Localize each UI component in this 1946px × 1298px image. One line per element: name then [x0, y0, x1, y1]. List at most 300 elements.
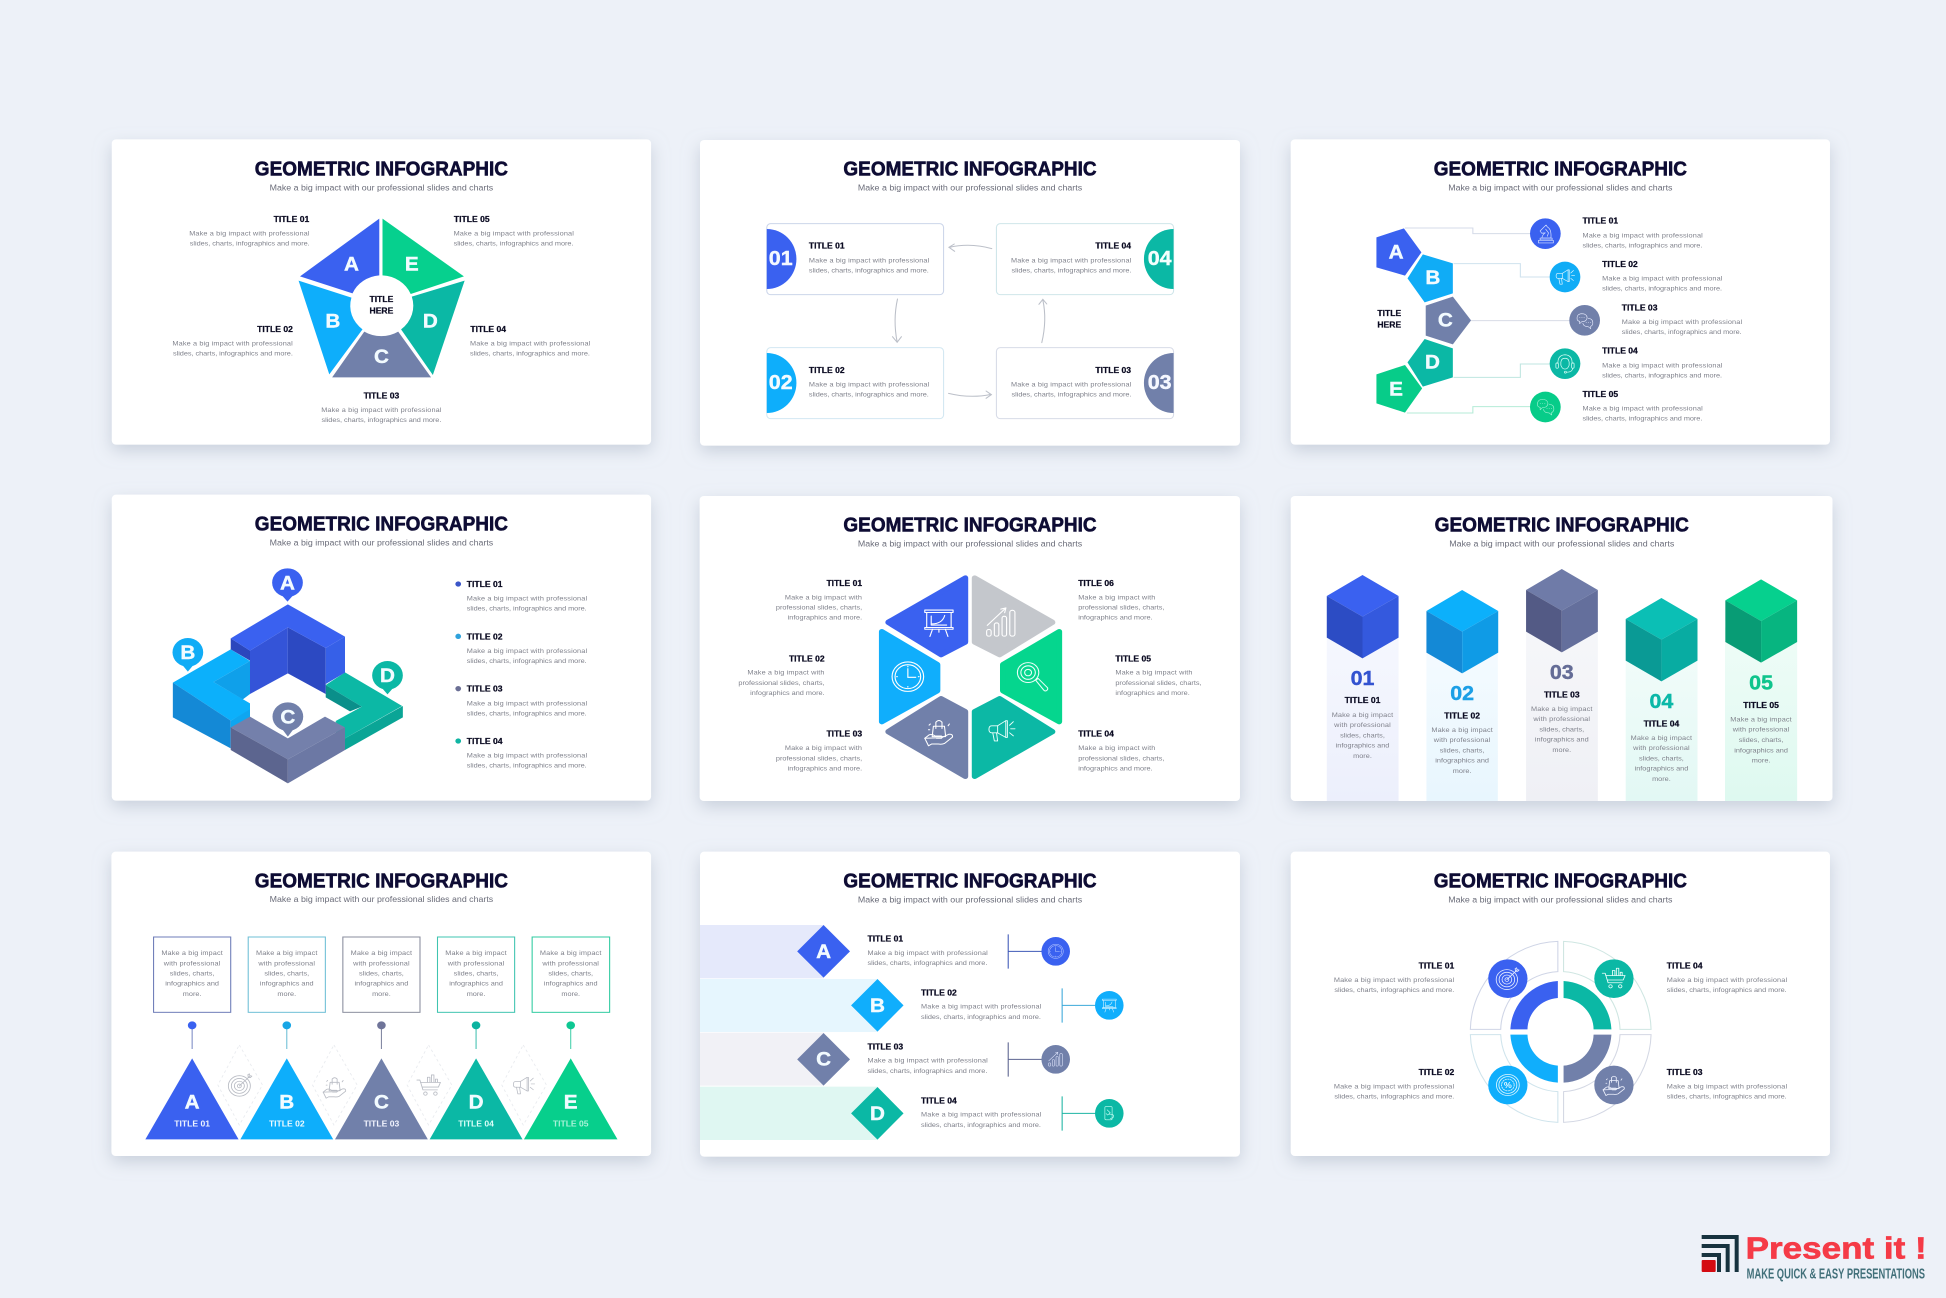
text box C [343, 937, 420, 1012]
icon: percent ring: % [1504, 1080, 1512, 1090]
pin connectors [188, 1021, 575, 1049]
logo mark [1702, 1237, 1737, 1272]
text: title 04: Make a big impact with professional [1602, 362, 1723, 369]
column 04: infographics and [1635, 765, 1688, 773]
text box A: more. [183, 990, 202, 998]
connector + phone icon [1062, 1096, 1124, 1131]
marker B: B [180, 643, 195, 664]
marker A [272, 568, 303, 602]
text: title 01: Make a big impact with professional [1582, 232, 1703, 239]
label: title here: TITLE [1377, 308, 1402, 318]
hexagon segments [882, 578, 1059, 776]
text: title 05: slides, charts, infographics and more. [454, 240, 573, 248]
column 05: more. [1752, 757, 1770, 765]
pentagon chain: B [1425, 268, 1440, 289]
heading: GEOMETRIC INFOGRAPHIC [843, 514, 1097, 536]
text box C: with professional [352, 960, 410, 967]
text: title 04: Make a big impact with professional [921, 1111, 1042, 1119]
text: title 03: TITLE 03 [364, 391, 400, 400]
triangle E [524, 1058, 617, 1139]
text: title 02: Make a big impact with [747, 669, 825, 677]
column 01: infographics and [1336, 742, 1389, 750]
text: title 04 [470, 324, 591, 358]
icon: cart [417, 1075, 440, 1095]
label: title here: HERE [1377, 320, 1402, 330]
text: title 04: slides, charts, infographics and more. [1667, 986, 1787, 994]
isometric block chart [173, 604, 403, 783]
triangle A: TITLE 01 [174, 1119, 210, 1129]
icon: target [228, 1074, 252, 1096]
text: title 03 [321, 391, 442, 424]
pentagon chain: D [1425, 352, 1440, 373]
text: title 03: professional slides, charts, [776, 755, 862, 762]
text box E: infographics and [544, 980, 598, 988]
column 02 [1426, 590, 1498, 775]
list item 01: TITLE 01 [467, 579, 503, 589]
text: title 01: Make a big impact with professional [1334, 976, 1455, 984]
logo: Present it [1702, 1231, 1927, 1282]
icon: target [1488, 959, 1527, 998]
list item 02: TITLE 02 [467, 632, 503, 641]
panel 5: hexagon [700, 496, 1240, 801]
triangle A: A [185, 1092, 200, 1113]
heading: Make a big impact with our professional slides and charts [1448, 895, 1672, 904]
column 03 [1526, 569, 1598, 754]
text: title 02: Make a big impact with professional [1602, 275, 1723, 283]
list item 01 [455, 579, 588, 613]
triangle E: TITLE 05 [553, 1119, 589, 1129]
column 04: Make a big impact [1631, 734, 1692, 742]
text: title 04: slides, charts, infographics and more. [470, 350, 590, 358]
text: title 04 [921, 1096, 1042, 1129]
marker B [172, 638, 203, 672]
text: title 01 [189, 214, 310, 248]
text: title 04: Make a big impact with professional [470, 340, 591, 348]
pentagon chart: B [325, 311, 340, 332]
diamond B: B [870, 996, 885, 1017]
column 01 [1327, 575, 1399, 760]
pentagon chain: A [1389, 242, 1404, 263]
text box B: more. [277, 990, 296, 998]
text box A: infographics and [165, 980, 219, 988]
card 02 [767, 348, 944, 419]
text box E: Make a big impact [540, 949, 602, 957]
label: title here [1377, 308, 1402, 330]
heading: GEOMETRIC INFOGRAPHIC [843, 870, 1097, 892]
text box B: Make a big impact [256, 949, 318, 957]
column 02: TITLE 02 [1444, 711, 1480, 721]
text: title 02 [1334, 1067, 1455, 1100]
column 04 [1626, 598, 1697, 783]
text box A [154, 937, 231, 1012]
triangle D: D [469, 1092, 484, 1113]
text box A: slides, charts, [170, 970, 215, 977]
text box A: Make a big impact [161, 949, 223, 957]
heading [255, 513, 508, 548]
text: title 02: TITLE 02 [1419, 1067, 1455, 1077]
text: title 03: TITLE 03 [826, 729, 863, 739]
list item 02: Make a big impact with professional [467, 647, 588, 655]
card 01: Make a big impact with professional [809, 257, 930, 264]
card background [700, 852, 1240, 1157]
text: title 03: infographics and more. [788, 765, 862, 772]
text: title 03: slides, charts, infographics and more. [867, 1067, 987, 1075]
text: title 01: TITLE 01 [274, 214, 310, 224]
text: title 03 [1667, 1067, 1788, 1100]
list item 03: Make a big impact with professional [467, 700, 588, 707]
icon: chess knight [1530, 218, 1561, 249]
text: title 01 [1582, 216, 1703, 249]
card 03 [996, 348, 1174, 419]
panel 1: pentagon infographic [112, 139, 651, 445]
text: title 01 [867, 934, 988, 967]
card 01 [767, 224, 944, 295]
text: title 02: TITLE 02 [257, 324, 293, 334]
heading: Make a big impact with our professional slides and charts [858, 895, 1082, 904]
text: title 05: TITLE 05 [1115, 654, 1151, 663]
triangle D [430, 1058, 522, 1139]
list item 04: TITLE 04 [467, 736, 503, 746]
list item 02 [455, 632, 588, 665]
text: title 02 [1602, 259, 1723, 293]
heading [1434, 870, 1687, 904]
text: title 02: Make a big impact with professional [921, 1003, 1042, 1011]
marker C [272, 702, 303, 737]
text: title 02: slides, charts, infographics and more. [1602, 285, 1722, 293]
icon: chat question [1530, 392, 1561, 422]
card 02: TITLE 02 [809, 365, 845, 375]
panel 3: linked pentagons [1291, 139, 1830, 445]
heading: GEOMETRIC INFOGRAPHIC [1434, 158, 1687, 180]
text: title 02: slides, charts, infographics and more. [173, 350, 293, 358]
text box A: with professional [163, 960, 221, 967]
diamond D: D [870, 1104, 885, 1125]
list item 04 [455, 736, 588, 770]
text box E [532, 937, 610, 1012]
outer outlined quadrants [1470, 941, 1651, 1122]
column 04: 04 [1650, 691, 1674, 713]
column 02: 02 [1450, 683, 1474, 705]
list item 03 [455, 684, 588, 717]
pentagon chart [299, 219, 465, 377]
connector + clock icon [1008, 934, 1070, 969]
card 04: slides, charts, infographics and more. [1012, 267, 1131, 274]
list item 02: slides, charts, infographics and more. [467, 657, 587, 665]
triangle B: TITLE 02 [269, 1119, 305, 1129]
text: title 03 [776, 729, 863, 772]
text box D: more. [467, 990, 485, 998]
diamond D [851, 1087, 904, 1140]
text: title 04: TITLE 04 [1078, 729, 1114, 739]
text: title 04: Make a big impact with professional [1667, 976, 1788, 984]
text box D [437, 937, 515, 1012]
heading [1435, 514, 1689, 549]
card background [1291, 139, 1830, 445]
column 01: 01 [1351, 668, 1374, 690]
column 03: more. [1552, 746, 1571, 754]
text box C: more. [372, 990, 391, 998]
text: title 02 [921, 988, 1042, 1021]
column 04: TITLE 04 [1644, 719, 1680, 728]
heading: GEOMETRIC INFOGRAPHIC [255, 513, 508, 535]
column 03: slides, charts, [1539, 726, 1584, 733]
text: title 05: Make a big impact with [1115, 669, 1193, 677]
icon: magnifier [1017, 663, 1048, 691]
marker C: C [280, 707, 295, 728]
text: title 02: infographics and more. [750, 689, 825, 697]
text: title 03: slides, charts, infographics and more. [1622, 328, 1742, 336]
text: title 01: professional slides, charts, [776, 604, 862, 612]
triangle D: TITLE 04 [458, 1119, 494, 1129]
text box D: with professional [447, 960, 505, 967]
text box D: infographics and [449, 980, 503, 988]
column 02: with professional [1433, 736, 1491, 744]
heading: Make a big impact with our professional slides and charts [270, 894, 493, 904]
card background [111, 852, 651, 1156]
column 05: infographics and [1734, 747, 1788, 754]
pentagon chart: TITLE [370, 294, 394, 304]
column 02: infographics and [1435, 757, 1489, 765]
marker D [372, 661, 403, 694]
card 04: Make a big impact with professional [1011, 257, 1132, 264]
heading [255, 870, 508, 904]
pentagon chart: HERE [370, 306, 394, 315]
text: title 03: TITLE 03 [867, 1042, 904, 1051]
text: title 05 [454, 214, 574, 248]
text: title 05 [1115, 654, 1202, 697]
pentagon chart: E [405, 254, 419, 275]
triangle A [145, 1058, 239, 1139]
text: title 01: slides, charts, infographics and more. [1582, 242, 1702, 249]
diamond C: C [816, 1049, 831, 1070]
heading: Make a big impact with our professional slides and charts [270, 183, 493, 193]
colored bands [700, 925, 877, 1140]
column 01: with professional [1333, 721, 1391, 729]
arrow: 02 to 03 [949, 391, 991, 398]
text: title 04: TITLE 04 [1667, 961, 1703, 970]
text: title 05: Make a big impact with professional [1582, 405, 1703, 413]
triangle B [240, 1058, 333, 1139]
text: title 01: infographics and more. [788, 614, 862, 622]
text: title 04: slides, charts, infographics and more. [921, 1121, 1041, 1129]
list item 04: slides, charts, infographics and more. [467, 762, 587, 770]
panel 4: isometric square [112, 495, 651, 801]
text: title 02: slides, charts, infographics and more. [921, 1013, 1041, 1021]
list item 03: slides, charts, infographics and more. [467, 710, 587, 717]
heading: Make a big impact with our professional slides and charts [1449, 539, 1674, 549]
card background [1291, 852, 1830, 1156]
column 04: with professional [1632, 744, 1690, 752]
arrow: 04 to 01 [949, 244, 992, 251]
column 03: Make a big impact [1531, 705, 1593, 713]
heading [843, 514, 1097, 549]
triangle C [335, 1058, 428, 1139]
text: title 01: slides, charts, infographics and more. [1334, 986, 1454, 994]
text: title 01: TITLE 01 [1582, 216, 1619, 226]
text: title 01: TITLE 01 [826, 578, 863, 588]
card 03: Make a big impact with professional [1011, 381, 1132, 389]
column 04: more. [1652, 775, 1671, 783]
text: title 05: TITLE 05 [454, 214, 490, 224]
panel 9: circular diagram [1291, 852, 1830, 1156]
column 03: 03 [1550, 662, 1574, 684]
panel 2: process cards [700, 140, 1240, 446]
column 03: with professional [1532, 715, 1590, 723]
text box E: slides, charts, [548, 970, 593, 977]
column 02: more. [1453, 767, 1472, 775]
text: title 01: Make a big impact with professional [189, 230, 310, 238]
column backgrounds [1327, 617, 1797, 801]
text: title 02 [738, 654, 825, 697]
icon: cart [1594, 959, 1634, 998]
heading: GEOMETRIC INFOGRAPHIC [1434, 870, 1687, 892]
text box B [248, 937, 325, 1012]
icon: presentation [925, 610, 953, 636]
column 05: 05 [1749, 672, 1773, 694]
card 01: 01 [769, 248, 793, 270]
text box C: Make a big impact [351, 949, 412, 957]
diamond B [851, 979, 904, 1032]
icon: clock [892, 662, 924, 691]
text: title 02: Make a big impact with professional [172, 340, 293, 348]
card 03: TITLE 03 [1095, 365, 1131, 375]
triangle B: B [279, 1092, 294, 1113]
card background [1291, 496, 1832, 801]
donut chart [1510, 981, 1611, 1083]
card 02: slides, charts, infographics and more. [809, 391, 929, 399]
marker A: A [280, 573, 295, 594]
heading: GEOMETRIC INFOGRAPHIC [843, 158, 1097, 180]
text: title 03: Make a big impact with [785, 744, 862, 752]
text: title 02: professional slides, charts, [738, 679, 825, 687]
text: title 03: Make a big impact with professional [1667, 1083, 1788, 1090]
text: title 04: Make a big impact with [1078, 744, 1155, 752]
text: title 05: infographics and more. [1115, 689, 1190, 697]
text box B: slides, charts, [264, 970, 309, 977]
icon: chat bubbles [1569, 305, 1600, 336]
text: title 05 [1582, 389, 1703, 423]
pentagon chart: C [374, 347, 389, 368]
card 04: 04 [1148, 248, 1172, 270]
text: title 01: slides, charts, infographics and more. [867, 959, 987, 967]
pentagon chart: D [423, 311, 438, 332]
text: title 05: Make a big impact with professional [454, 230, 574, 238]
column 01: slides, charts, [1340, 732, 1385, 739]
heading [255, 158, 508, 193]
icon: megaphone [989, 721, 1015, 741]
text box B: with professional [257, 960, 315, 967]
card 02: Make a big impact with professional [809, 381, 930, 389]
text: title 06: Make a big impact with [1078, 594, 1155, 602]
panel 6: cube columns [1291, 496, 1832, 801]
triangle E: E [564, 1092, 578, 1113]
panel 8: diamonds timeline [700, 852, 1240, 1157]
heading: GEOMETRIC INFOGRAPHIC [1435, 514, 1689, 536]
text: title 06 [1078, 578, 1164, 622]
pentagon chain [1376, 228, 1471, 413]
diamond A [797, 925, 850, 978]
column 03: infographics and [1535, 736, 1589, 744]
text: title 02 [172, 324, 293, 358]
text: title 01: Make a big impact with [785, 594, 862, 602]
pentagon chart: A [344, 254, 359, 275]
text: title 04: TITLE 04 [921, 1096, 957, 1105]
card background [700, 496, 1240, 801]
card 03: 03 [1148, 372, 1172, 394]
card 04: TITLE 04 [1095, 241, 1131, 251]
icon: percent ring [1488, 1066, 1527, 1104]
text: title 03: Make a big impact with professional [321, 406, 442, 414]
connector lines [1405, 228, 1569, 413]
icon: megaphone [1550, 262, 1580, 292]
triangle C: C [374, 1092, 389, 1113]
heading [843, 158, 1097, 193]
text: title 03: TITLE 03 [1622, 303, 1658, 312]
card 04 [996, 224, 1174, 295]
text: title 03: slides, charts, infographics and more. [321, 416, 441, 424]
card 01: slides, charts, infographics and more. [809, 267, 929, 274]
text: title 01: TITLE 01 [1419, 961, 1455, 970]
text: title 04: TITLE 04 [1602, 346, 1638, 356]
column 05 [1725, 579, 1797, 765]
heading: Make a big impact with our professional slides and charts [858, 539, 1082, 549]
triangle C: TITLE 03 [364, 1119, 400, 1129]
diamond A: A [816, 942, 831, 963]
text: title 01: slides, charts, infographics and more. [190, 240, 310, 248]
column 02: slides, charts, [1440, 747, 1485, 754]
panel 7: triangles [111, 852, 651, 1156]
card 03: slides, charts, infographics and more. [1012, 391, 1131, 399]
diamond C [797, 1033, 850, 1086]
list item 01: slides, charts, infographics and more. [467, 605, 587, 613]
text: title 04: professional slides, charts, [1078, 755, 1164, 762]
card background [700, 140, 1240, 446]
text: title 02: TITLE 02 [921, 988, 957, 997]
column 01: more. [1353, 752, 1372, 760]
column 01: TITLE 01 [1345, 695, 1381, 705]
text: title 02: Make a big impact with professional [1334, 1083, 1455, 1090]
text: title 03: Make a big impact with professional [867, 1057, 988, 1065]
text: title 01: Make a big impact with professional [867, 949, 988, 957]
text: title 04 [1602, 346, 1723, 379]
heading: GEOMETRIC INFOGRAPHIC [255, 870, 508, 892]
text: title 06: professional slides, charts, [1078, 604, 1164, 612]
text: title 03 [867, 1042, 988, 1075]
pentagon chain: E [1389, 379, 1403, 400]
heading: Make a big impact with our professional slides and charts [270, 538, 493, 548]
text: title 04: slides, charts, infographics and more. [1602, 372, 1722, 379]
column 01: Make a big impact [1332, 711, 1393, 719]
text box B: infographics and [260, 980, 314, 988]
text box C: infographics and [355, 980, 408, 988]
heading [843, 870, 1097, 904]
text: title 01 [1334, 961, 1455, 994]
heading: Make a big impact with our professional slides and charts [858, 183, 1082, 193]
text: title 05: TITLE 05 [1582, 389, 1619, 399]
icon: bag in hand [323, 1078, 346, 1098]
marker D: D [380, 666, 395, 687]
text: title 04 [1078, 729, 1164, 772]
icon: bag in hand [1594, 1066, 1634, 1104]
heading: GEOMETRIC INFOGRAPHIC [255, 158, 508, 180]
text: title 02: TITLE 02 [1602, 259, 1638, 269]
text: title 05: slides, charts, infographics and more. [1582, 415, 1702, 423]
icon: headset [1550, 348, 1580, 379]
text: title 06: infographics and more. [1078, 614, 1153, 622]
text: title 03: TITLE 03 [1667, 1067, 1703, 1077]
text: title 03 [1622, 303, 1743, 336]
text box C: slides, charts, [359, 970, 404, 977]
